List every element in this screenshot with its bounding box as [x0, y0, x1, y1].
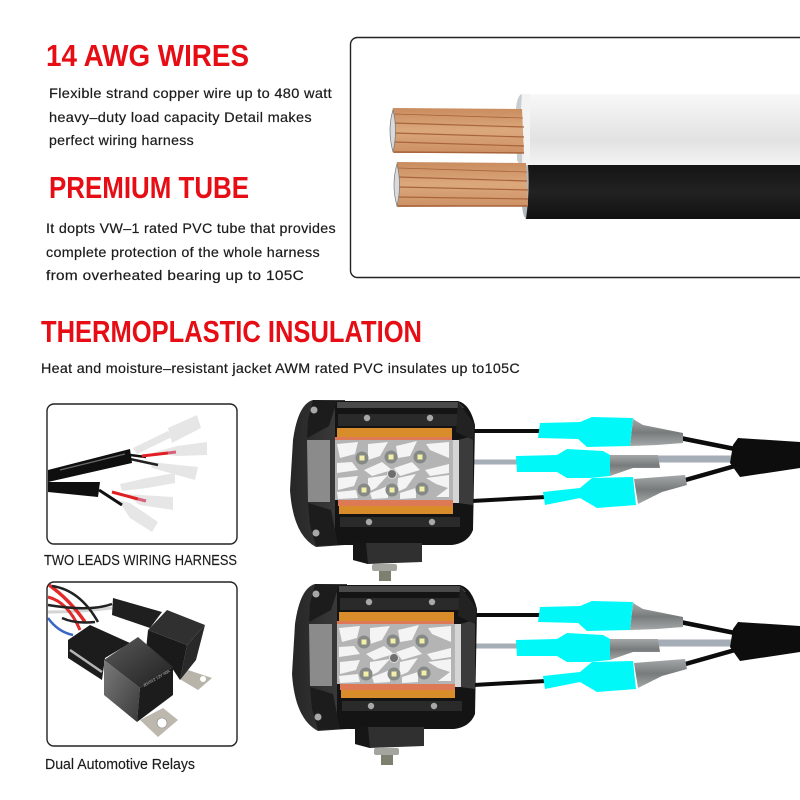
caption: dual automotive relays: Dual Automotive Relays: [45, 757, 195, 773]
panel: two leads wiring harness: [47, 404, 237, 544]
left cap: [292, 584, 347, 731]
mount bracket: [353, 543, 422, 564]
screws: [312, 590, 437, 720]
harness cables: [48, 449, 132, 497]
black cable jacket: [522, 165, 800, 219]
light housing: [290, 400, 475, 581]
front relay: JD1912 12V 40A: [142, 668, 171, 688]
text block: tube description: from overheated bearing up to 105C: [46, 267, 304, 283]
text block: insulation description: Heat and moisture–resistant jacket AWM rated PVC insulates up to105C: [41, 360, 520, 376]
front relay: [68, 625, 178, 737]
LED lens: [337, 624, 455, 684]
harness terminals: [118, 415, 207, 532]
wire sleeve: [730, 622, 800, 661]
LED light assembly: top: [290, 400, 800, 581]
wires: [470, 431, 735, 501]
body: [335, 401, 475, 545]
text block: tube description: It dopts VW–1 rated PVC tube that provides: [46, 220, 336, 236]
panel: dual automotive relays: [47, 582, 237, 746]
relay wires: [48, 585, 112, 635]
text block: tube description: complete protection of the whole harness: [46, 244, 320, 260]
LED chips: [356, 450, 428, 496]
text block: wire description: perfect wiring harness: [49, 132, 194, 148]
harness wires: [99, 452, 176, 505]
LED light assembly: bottom: [292, 584, 800, 765]
white cable jacket: [516, 94, 800, 166]
clear connector boots: [610, 603, 687, 688]
wires: [472, 615, 735, 685]
rear relay: [112, 598, 212, 690]
text block: wire description: heavy–duty load capacity Detail makes: [49, 109, 312, 125]
text block: wire description: [49, 85, 332, 148]
heading: 14 AWG wires: 14 AWG WIRES: [46, 39, 249, 73]
grey side panel: [309, 624, 332, 686]
left cap: [290, 400, 345, 547]
panel: cable cross-section: [350, 38, 800, 278]
right side: [460, 620, 475, 689]
amber strips: [337, 428, 452, 437]
heading: premium tube: PREMIUM TUBE: [49, 171, 249, 205]
text block: wire description: Flexible strand copper wire up to 480 watt: [49, 85, 332, 101]
cyan terminals: [516, 417, 636, 508]
body: [337, 585, 477, 729]
amber strips: [339, 612, 454, 621]
copper conductor: lower: [394, 162, 528, 207]
right side: [458, 436, 473, 505]
corner wedges: [309, 584, 339, 622]
caption: two leads wiring harness: TWO LEADS WIRING HARNESS: [44, 553, 237, 569]
corner wedges: [307, 400, 337, 438]
cyan terminals: [516, 601, 636, 692]
LED chips: [358, 634, 430, 680]
wire sleeve: [730, 438, 800, 477]
mount bracket: [355, 727, 424, 748]
clear connector boots: [610, 419, 687, 504]
grey side panel: [307, 440, 330, 502]
light housing: [292, 584, 477, 765]
copper conductor: upper: [390, 108, 524, 153]
heading: thermoplastic insulation: THERMOPLASTIC INSULATION: [41, 315, 422, 349]
screws: [310, 406, 435, 536]
LED lens: [335, 440, 453, 500]
text block: tube description: [46, 220, 336, 283]
